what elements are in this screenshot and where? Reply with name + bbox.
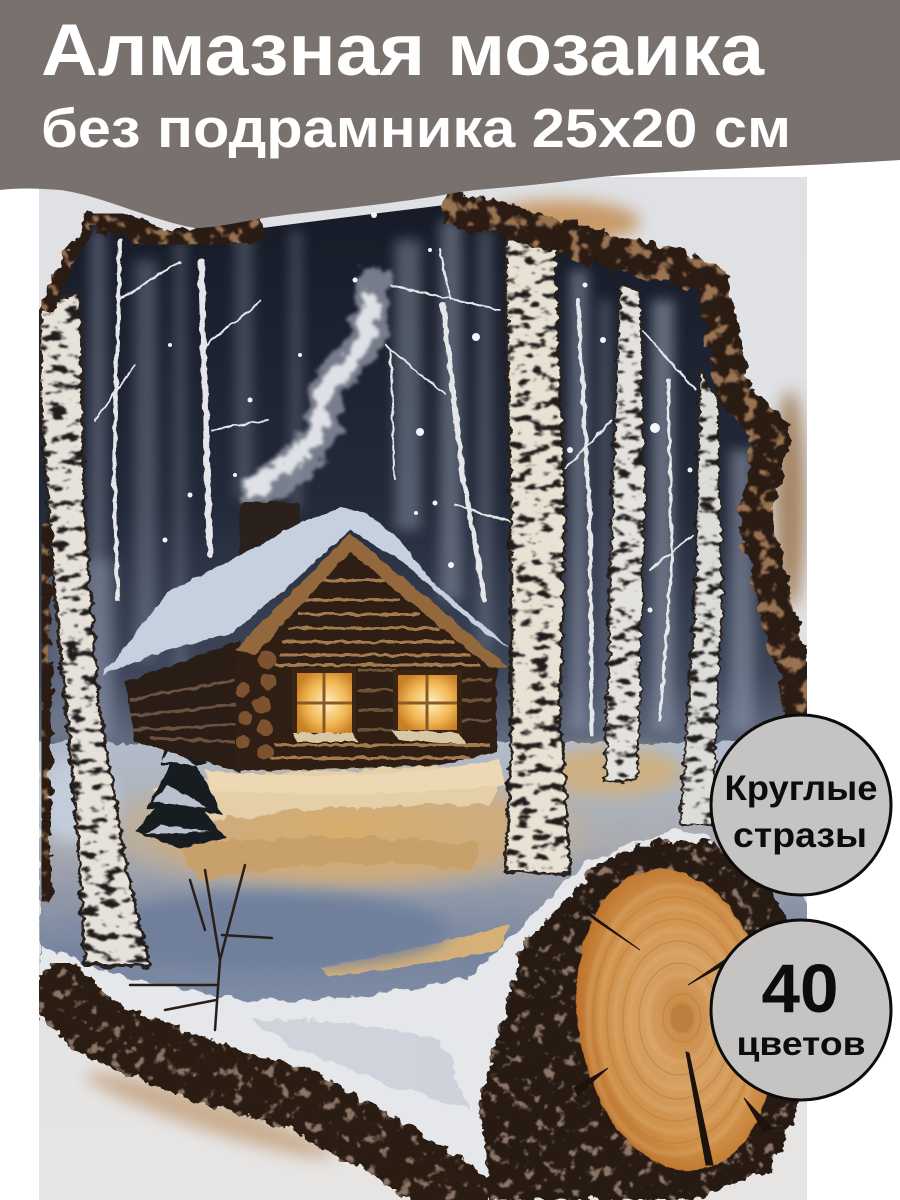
subtitle: без подрамника 25х20 см: [41, 97, 791, 159]
chimney: [239, 500, 300, 556]
log bark: [480, 841, 800, 1200]
chimney smoke: [255, 285, 373, 492]
birch trunks: [40, 240, 722, 965]
gable boards: [235, 533, 510, 668]
painting: [33, 177, 807, 1200]
darker rings: [593, 897, 757, 1143]
right window: [393, 670, 462, 734]
forest interior: [39, 205, 807, 1112]
thin white trees and branches: [95, 240, 695, 735]
badge: 40 colours: [711, 920, 891, 1100]
wood cracks: [574, 908, 772, 1165]
header banner: [0, 0, 900, 228]
roof snow: [102, 508, 512, 675]
badge: round rhinestones: стразы: [733, 816, 867, 855]
title: Алмазная мозаика: [41, 10, 766, 91]
corner log ends: [236, 651, 276, 760]
tree rings: [588, 886, 762, 1154]
left window: [292, 668, 356, 736]
foreground snow bank: [40, 828, 712, 1084]
snow ground: [39, 740, 807, 1003]
pine tree: [135, 750, 227, 848]
badge: round rhinestones: [711, 715, 891, 895]
warm light on the snow: [33, 748, 682, 976]
bare bush: [130, 865, 272, 1030]
heart of the wood: [670, 1003, 694, 1033]
window sills: [293, 730, 466, 744]
central birch: [505, 240, 570, 875]
bark rim: [42, 207, 803, 1200]
canvas background with warm stains: [39, 177, 807, 1200]
side wall: [125, 640, 240, 772]
snowflakes: [162, 212, 692, 612]
background tree streaks: [45, 220, 754, 740]
snow at cabin base: [205, 760, 505, 794]
badge: round rhinestones: Круглые: [724, 769, 878, 808]
snow shadow: [250, 1019, 470, 1110]
third birch: [605, 285, 645, 782]
badge: 40 colours: 40: [762, 950, 838, 1027]
badge: 40 colours: цветов: [736, 1025, 866, 1062]
left birch: [40, 290, 150, 965]
cabin: [102, 502, 512, 794]
fourth birch: [680, 370, 722, 825]
log: [480, 841, 800, 1200]
wood cross-section: [576, 867, 768, 1172]
front wall: [235, 535, 497, 770]
night sky: [39, 200, 807, 760]
